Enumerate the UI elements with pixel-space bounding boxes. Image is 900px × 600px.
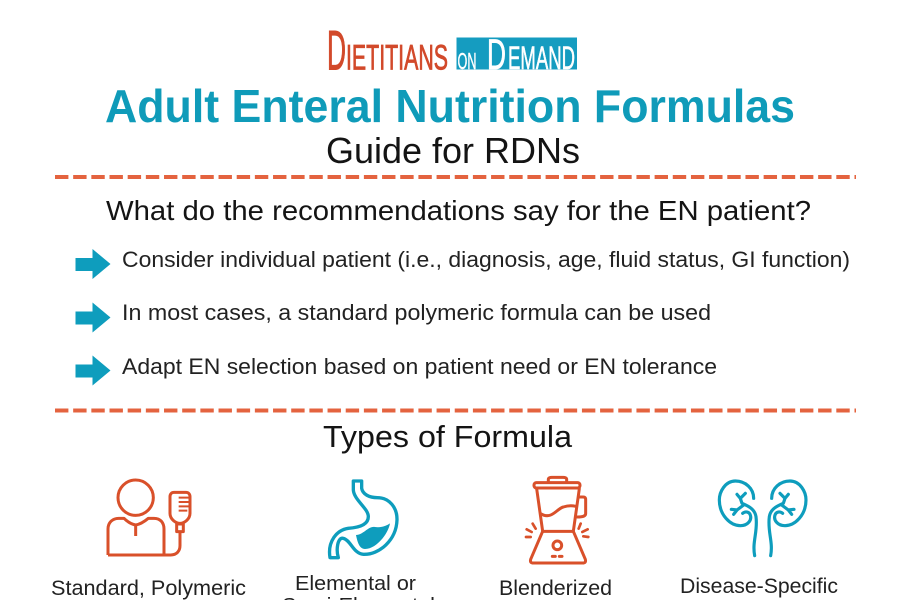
label: elemental or semi-elemental: Elemental or	[295, 572, 416, 595]
arrow 2	[76, 302, 110, 332]
recommendation 1: Consider individual patient (i.e., diagnosis, age, fluid status, GI function)	[122, 247, 850, 272]
logo: Dietitians on Demand: D	[327, 18, 346, 82]
icon: blender	[526, 477, 588, 563]
icon: stomach	[330, 481, 397, 558]
logo: Dietitians on Demand: ON	[458, 48, 476, 74]
recommendation 3: Adapt EN selection based on patient need or EN tolerance	[122, 354, 717, 379]
label: disease-specific: Disease-Specific	[680, 575, 838, 598]
logo: Dietitians on Demand	[327, 18, 577, 82]
icon: patient with feeding bag	[108, 480, 190, 555]
logo: Dietitians on Demand: IETITIANS	[346, 38, 448, 78]
subtitle: Guide for RDNs	[326, 130, 580, 171]
title: Adult Enteral Nutrition Formulas	[105, 80, 795, 132]
recommendation 2: In most cases, a standard polymeric formula can be used	[122, 300, 711, 325]
label: blenderized: Blenderized	[499, 577, 612, 600]
logo: Dietitians on Demand: EMAND	[508, 40, 575, 76]
logo: Dietitians on Demand: D	[487, 31, 506, 79]
heading: types of formula: Types of Formula	[323, 419, 573, 454]
arrow 1	[76, 249, 110, 279]
arrow 3	[76, 356, 110, 386]
label: standard polymeric: Standard, Polymeric	[51, 577, 246, 600]
heading: recommendations: What do the recommendations say for the EN patient?	[106, 195, 811, 226]
icon: kidneys	[719, 481, 806, 556]
label: elemental or semi-elemental	[282, 572, 435, 600]
